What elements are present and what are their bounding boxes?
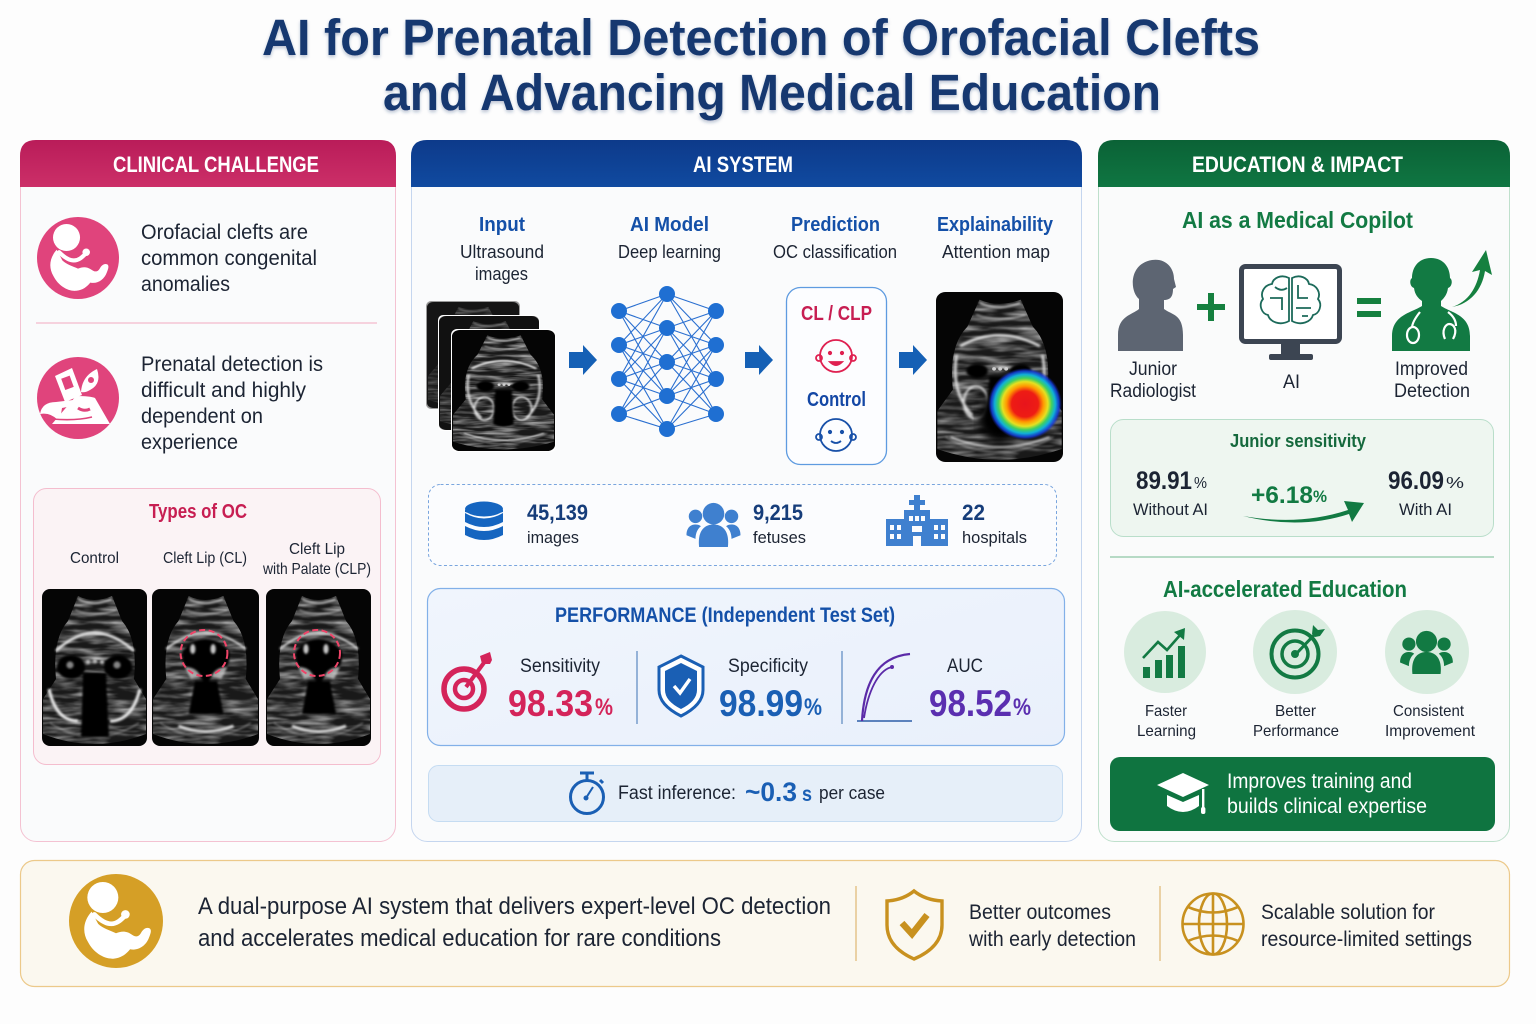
stat: images xyxy=(527,500,588,547)
title: and Advancing Medical Education xyxy=(383,64,1161,121)
icon: plus xyxy=(1197,293,1225,321)
arrow: input to model xyxy=(569,345,597,375)
metric: AUC: AUC xyxy=(947,656,983,677)
fast inference bar: ~0.3 xyxy=(745,777,797,807)
step: explainability: Explainability xyxy=(937,214,1054,236)
label: improved detection: Improved xyxy=(1395,359,1468,380)
metric: sensitivity xyxy=(508,656,613,724)
label: cleft lip with palate: Cleft Lip xyxy=(289,541,345,558)
icon: fetus xyxy=(37,217,119,299)
text: scalable solution: resource-limited settings xyxy=(1261,928,1472,951)
text: orofacial clefts: common congenital xyxy=(141,247,317,270)
metric: with AI xyxy=(1388,467,1464,519)
panel: AI system xyxy=(411,140,1082,842)
step: input: images xyxy=(475,264,528,284)
stat: fetuses xyxy=(753,500,806,547)
label: improved detection xyxy=(1394,359,1470,402)
fast inference bar: per case xyxy=(819,783,885,803)
performance panel: PERFORMANCE (Independent Test Set) xyxy=(555,604,895,627)
heading: accelerated education: AI-accelerated Education xyxy=(1163,576,1407,602)
icon: junior radiologist xyxy=(1118,260,1183,351)
icon: equals xyxy=(1357,298,1381,317)
label: consistent improvement: Improvement xyxy=(1385,723,1476,740)
text: orofacial clefts: anomalies xyxy=(141,273,230,296)
metric: AUC xyxy=(929,656,1031,724)
prediction box xyxy=(786,288,886,464)
label: junior radiologist: Radiologist xyxy=(1110,381,1197,402)
text: orofacial clefts xyxy=(141,221,317,296)
label: consistent improvement: Consistent xyxy=(1393,703,1465,720)
label: better performance: Better xyxy=(1275,703,1317,720)
text: prenatal detection xyxy=(141,353,323,454)
stat: hospitals xyxy=(962,500,1027,547)
metric: without AI: 89.91 xyxy=(1136,467,1192,495)
text: prenatal detection: experience xyxy=(141,431,238,454)
stat: fetuses: 9,215 xyxy=(753,500,803,525)
icon: globe xyxy=(1182,894,1244,954)
text: prenatal detection: dependent on xyxy=(141,405,263,428)
heading: types of OC: Types of OC xyxy=(149,501,247,523)
step: AI model: AI Model xyxy=(630,214,709,236)
stat: images: images xyxy=(527,528,579,547)
label: AI: AI xyxy=(1283,372,1300,393)
heading: clinical challenge xyxy=(20,140,396,187)
label: faster learning: Faster xyxy=(1145,703,1188,720)
arrow: prediction to attention map xyxy=(899,345,927,375)
metric: AUC: % xyxy=(1013,694,1031,721)
heading: education and impact xyxy=(1098,140,1510,187)
image stack: input ultrasounds xyxy=(426,301,556,452)
icon: database xyxy=(465,502,503,540)
label: cleft lip with palate xyxy=(262,541,371,578)
step: input: Ultrasound xyxy=(460,242,544,262)
panel: types of OC xyxy=(34,488,380,764)
text: prenatal detection: Prenatal detection is xyxy=(141,353,323,376)
icon: shield check xyxy=(887,891,942,959)
step: prediction: OC classification xyxy=(773,242,897,262)
label: better performance xyxy=(1253,703,1339,740)
icon: ROC curve xyxy=(857,654,912,721)
panel: education and impact xyxy=(1098,140,1510,842)
label: faster learning: Learning xyxy=(1137,723,1196,740)
metric: with AI: With AI xyxy=(1399,500,1452,519)
fast inference bar xyxy=(428,766,1062,822)
icon: better performance xyxy=(1253,610,1337,694)
image: control ultrasound xyxy=(42,589,147,746)
text: summary: A dual-purpose AI system that delivers expert-level OC detection xyxy=(198,893,831,920)
label: consistent improvement xyxy=(1385,703,1476,740)
text: scalable solution xyxy=(1261,901,1472,951)
prediction box: Control xyxy=(807,389,866,411)
heading: medical copilot: AI as a Medical Copilot xyxy=(1182,207,1413,233)
metric: with AI: 96.09 xyxy=(1388,467,1444,495)
callout: training: Improves training and xyxy=(1227,770,1412,793)
dataset statistics xyxy=(428,484,1056,566)
metric: specificity xyxy=(719,656,822,724)
step: explainability xyxy=(937,214,1054,262)
step: AI model xyxy=(618,214,721,262)
icon: control face xyxy=(816,419,856,451)
label: junior radiologist: Junior xyxy=(1129,359,1178,380)
image: cleft lip and palate ultrasound xyxy=(266,589,371,746)
label: cleft lip with palate: with Palate (CLP) xyxy=(262,561,371,578)
stat: images: 45,139 xyxy=(527,500,588,525)
metric: without AI: Without AI xyxy=(1133,500,1208,519)
text: better outcomes xyxy=(968,901,1136,951)
icon: AI monitor xyxy=(1242,266,1340,360)
metric: without AI: % xyxy=(1194,475,1207,492)
heading: education and impact: EDUCATION & IMPACT xyxy=(1192,152,1403,177)
label: improved detection: Detection xyxy=(1394,381,1470,402)
performance panel xyxy=(428,588,1064,746)
icon: graduation cap xyxy=(1157,773,1209,814)
stat: hospitals: hospitals xyxy=(962,528,1027,547)
metric: specificity: % xyxy=(804,694,822,721)
step: explainability: Attention map xyxy=(942,242,1050,262)
metric: with AI: % xyxy=(1446,475,1464,492)
arrow: improvement xyxy=(1243,501,1364,523)
title: AI for Prenatal Detection of Orofacial Clefts xyxy=(262,9,1260,66)
step: input xyxy=(460,214,544,284)
fast inference bar: Fast inference: xyxy=(618,783,736,804)
text: summary: and accelerates medical education for rare conditions xyxy=(198,925,721,952)
stat: fetuses: fetuses xyxy=(753,528,806,547)
heading: AI system xyxy=(411,140,1082,187)
text: better outcomes: Better outcomes xyxy=(969,901,1111,924)
arrow: model to prediction xyxy=(745,345,773,375)
metric: AUC: 98.52 xyxy=(929,683,1012,724)
text: scalable solution: Scalable solution for xyxy=(1261,901,1435,924)
icon: stopwatch xyxy=(570,773,604,814)
panel: conclusion xyxy=(20,860,1510,986)
step: input: Input xyxy=(479,214,525,236)
panel: clinical challenge xyxy=(20,140,396,842)
metric: sensitivity: 98.33 xyxy=(508,683,593,724)
icon: affected face xyxy=(816,340,856,372)
icon: people xyxy=(686,503,740,549)
title xyxy=(262,9,1260,121)
prediction box: CL / CLP xyxy=(801,303,872,325)
stat: hospitals: 22 xyxy=(962,500,985,525)
icon: fetus gold xyxy=(69,874,163,968)
step: prediction xyxy=(773,214,897,262)
text: better outcomes: with early detection xyxy=(968,928,1136,951)
image: cleft lip ultrasound xyxy=(152,589,259,746)
callout: training: builds clinical expertise xyxy=(1227,795,1427,818)
callout: training xyxy=(1110,757,1495,831)
fast inference bar: s xyxy=(802,783,812,806)
metric: specificity: 98.99 xyxy=(719,683,803,724)
metric: sensitivity: % xyxy=(595,694,613,721)
label: better performance: Performance xyxy=(1253,723,1339,740)
metric: specificity: Specificity xyxy=(728,656,808,677)
label: junior radiologist xyxy=(1110,359,1197,402)
junior sensitivity box: Junior sensitivity xyxy=(1230,431,1366,451)
label: cleft lip: Cleft Lip (CL) xyxy=(163,550,247,567)
icon: ultrasound scan xyxy=(37,357,119,439)
metric: gain: % xyxy=(1313,487,1327,506)
text: orofacial clefts: Orofacial clefts are xyxy=(141,221,308,244)
metric: without AI xyxy=(1133,467,1208,519)
neural network xyxy=(611,286,724,437)
metric: gain: +6.18 xyxy=(1251,482,1313,509)
heading: clinical challenge: CLINICAL CHALLENGE xyxy=(113,152,319,177)
junior sensitivity box xyxy=(1110,420,1494,536)
step: AI model: Deep learning xyxy=(618,242,721,262)
icon: faster learning xyxy=(1124,611,1206,693)
metric: sensitivity: Sensitivity xyxy=(520,656,600,677)
icon: target xyxy=(444,652,492,709)
step: prediction: Prediction xyxy=(791,214,880,236)
label: faster learning xyxy=(1137,703,1196,740)
text: prenatal detection: difficult and highly xyxy=(141,379,306,402)
icon: consistent improvement xyxy=(1385,610,1469,694)
text: summary xyxy=(198,893,831,952)
icon: doctor with arrow xyxy=(1392,250,1492,351)
icon: shield xyxy=(659,656,703,716)
image: attention map xyxy=(936,292,1063,462)
label: control: Control xyxy=(70,550,119,567)
icon: hospital xyxy=(886,495,948,546)
heading: AI system: AI SYSTEM xyxy=(693,152,793,177)
